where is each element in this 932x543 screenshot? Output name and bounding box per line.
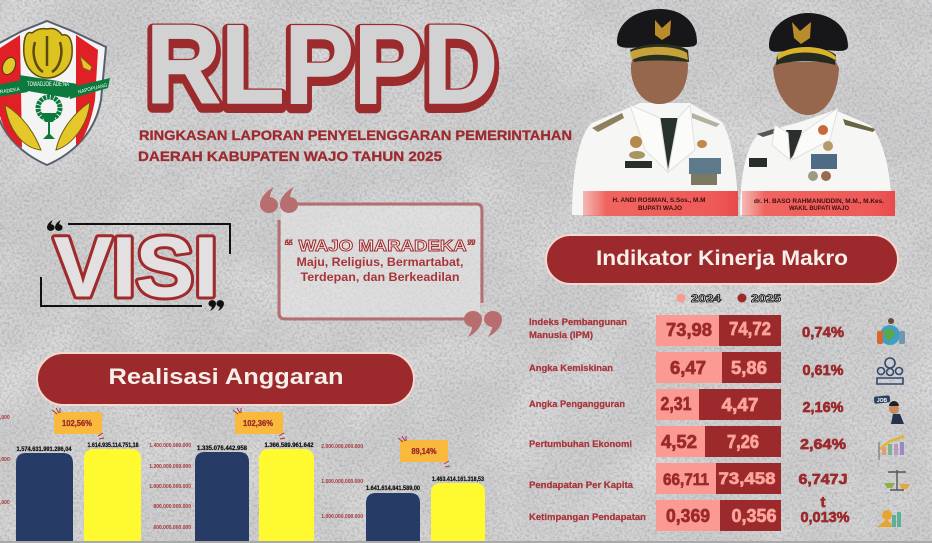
row: Pertumbuhan Ekonomi: 2,64% — [800, 436, 846, 453]
icon: balance scale — [884, 470, 910, 490]
bar chart: first budget comparison — [16, 408, 141, 541]
row: Ketimpangan Pendapatan: t — [820, 494, 826, 511]
row: IPM: 73,98 — [666, 320, 712, 340]
VISI heading with brackets: VISI — [54, 220, 218, 314]
axis labels: chart 2 — [149, 443, 191, 531]
row: Pendapatan Per Kapita: 66,711 — [663, 470, 709, 489]
logo ribbon: TOWADJOE ADE'NA — [27, 82, 69, 88]
heading: Realisasi Anggaran: Realisasi Anggaran — [108, 364, 344, 389]
icon: growth chart — [879, 435, 904, 460]
row: Angka Kemiskinan: 0,61% — [802, 362, 844, 379]
row: Pertumbuhan Ekonomi: 4,52 — [661, 432, 697, 452]
bar chart: first budget comparison: 1.574.631.991.286,04 — [16, 447, 72, 453]
row: IPM: Indeks Pembangunan — [529, 317, 627, 328]
row: Angka Kemiskinan: 6,47 — [670, 358, 706, 378]
name banner: Wakil Bupati — [742, 191, 895, 216]
icon: closing quote — [464, 311, 502, 337]
heading: Indikator Kinerja Makro — [546, 235, 898, 284]
logo ribbon — [0, 75, 110, 99]
row: Pertumbuhan Ekonomi: Pertumbuhan Ekonomi — [529, 439, 632, 450]
badge: 102,56%: 102,56% — [62, 419, 92, 428]
legend — [676, 293, 781, 305]
row: Angka Kemiskinan: Angka Kemiskinan — [529, 363, 613, 374]
axis labels: chart 2: 1.000.000.000.000 — [149, 484, 191, 490]
row: Angka Pengangguran: 2,31 — [660, 394, 692, 414]
badge: 102,36%: 102,36% — [243, 419, 273, 428]
axis labels: chart 3: 1.500.000.000.000 — [321, 479, 363, 485]
row: Angka Kemiskinan — [529, 352, 903, 384]
bar chart: second budget comparison: 1.366.589.961.642 — [264, 443, 314, 449]
logo ribbon: NAPOPUANG — [77, 82, 108, 96]
row: IPM: Manusia (IPM) — [529, 330, 593, 341]
icon: people and globe — [877, 318, 905, 345]
bar chart: third budget comparison: 1.463.414.161.318,53 — [432, 477, 485, 483]
row: Ketimpangan Pendapatan: Ketimpangan Pendapatan — [529, 512, 646, 523]
icon: opening quote — [260, 187, 298, 213]
row: Pendapatan Per Kapita: Pendapatan Per Kapita — [529, 480, 634, 491]
subtitle — [138, 127, 572, 164]
icon: job seeker: JOB — [877, 398, 888, 404]
photo: Wakil Bupati — [740, 13, 892, 215]
icon: poverty group — [877, 358, 903, 384]
logo ribbon: RADEKA — [0, 87, 21, 95]
legend: 2024 — [691, 293, 722, 305]
logo: Kabupaten Wajo shield — [0, 21, 110, 165]
icon: job seeker — [874, 395, 904, 424]
axis labels: chart 3: 2.000.000.000.000 — [321, 444, 363, 450]
bar chart: third budget comparison — [366, 436, 485, 541]
axis labels: chart 1: ,000 — [0, 415, 10, 421]
axis labels: chart 1 — [0, 415, 10, 506]
axis labels: chart 3: 1.000.000.000.000 — [321, 514, 363, 520]
row: Pertumbuhan Ekonomi: 7,26 — [727, 432, 759, 452]
bar chart: third budget comparison: 1.641.614.841.589,00 — [366, 486, 421, 492]
row: IPM: 74,72 — [729, 319, 771, 339]
row: Ketimpangan Pendapatan: 0,013% — [800, 509, 850, 526]
row: IPM — [529, 315, 905, 346]
axis labels: chart 2: 600.000.000.000 — [153, 525, 191, 531]
row: Ketimpangan Pendapatan — [529, 494, 901, 531]
bar chart: second budget comparison — [195, 408, 314, 541]
row: Angka Pengangguran: 2,16% — [802, 399, 844, 416]
row: Angka Pengangguran: 4,47 — [722, 395, 758, 415]
icon: money bag and bars — [877, 510, 901, 527]
vision text: Maju, Religius, Bermartabat, — [296, 257, 464, 269]
subtitle: RINGKASAN LAPORAN PENYELENGGARAN PEMERINTAHAN — [139, 127, 572, 143]
bar chart: second budget comparison: 1.335.076.442.958 — [197, 446, 248, 452]
heading: Realisasi Anggaran — [37, 353, 414, 405]
title: RLPPD: RLPPD — [146, 6, 498, 131]
VISI heading with brackets: VISI — [54, 220, 218, 314]
bar chart: first budget comparison: 1.614.935.114.751,18 — [88, 443, 139, 449]
axis labels: chart 2: 1.200.000.000.000 — [149, 464, 191, 470]
row: Pendapatan Per Kapita — [529, 463, 910, 494]
subtitle: DAERAH KABUPATEN WAJO TAHUN 2025 — [138, 148, 442, 164]
badge: 89,14%: 89,14% — [412, 447, 436, 456]
axis labels: chart 1: ,000 — [0, 500, 10, 506]
row: Ketimpangan Pendapatan: 0,356 — [732, 506, 776, 526]
legend: 2025 — [751, 293, 781, 305]
row: IPM: 0,74% — [802, 324, 844, 341]
name banner: Bupati: H. ANDI ROSMAN, S.Sos., M.M — [612, 197, 706, 204]
title: RLPPD: RLPPD — [146, 2, 498, 127]
heading: Indikator Kinerja Makro: Indikator Kinerja Makro — [596, 247, 848, 270]
row: Angka Pengangguran — [529, 389, 904, 424]
axis labels: chart 2: 800.000.000.000 — [153, 504, 191, 510]
vision title: “ WAJO MARADEKA” — [284, 238, 476, 255]
name banner: Wakil Bupati: WAKIL BUPATI WAJO — [789, 206, 849, 212]
vision text: Terdepan, dan Berkeadilan — [300, 272, 460, 284]
photo: Bupati — [572, 9, 738, 215]
axis labels: chart 2: 1.400.000.000.000 — [149, 443, 191, 449]
row: Ketimpangan Pendapatan: 0,369 — [666, 506, 710, 526]
row: Angka Pengangguran: Angka Pengangguran — [529, 399, 625, 410]
row: Pendapatan Per Kapita: 6,747J — [798, 471, 848, 488]
row: Pendapatan Per Kapita: 73,458 — [718, 469, 776, 488]
axis labels: chart 1: ,000 — [0, 457, 10, 463]
axis labels: chart 3 — [321, 444, 363, 520]
name banner: Bupati — [583, 191, 738, 216]
vision text — [296, 257, 464, 284]
name banner: Wakil Bupati: dr. H. BASO RAHMANUDDIN, M.M., M.Kes. — [754, 198, 884, 205]
row: Pertumbuhan Ekonomi — [529, 426, 904, 460]
panel: vision quote box — [260, 187, 502, 337]
row: Angka Kemiskinan: 5,86 — [731, 358, 767, 378]
name banner: Bupati: BUPATI WAJO — [638, 206, 682, 212]
